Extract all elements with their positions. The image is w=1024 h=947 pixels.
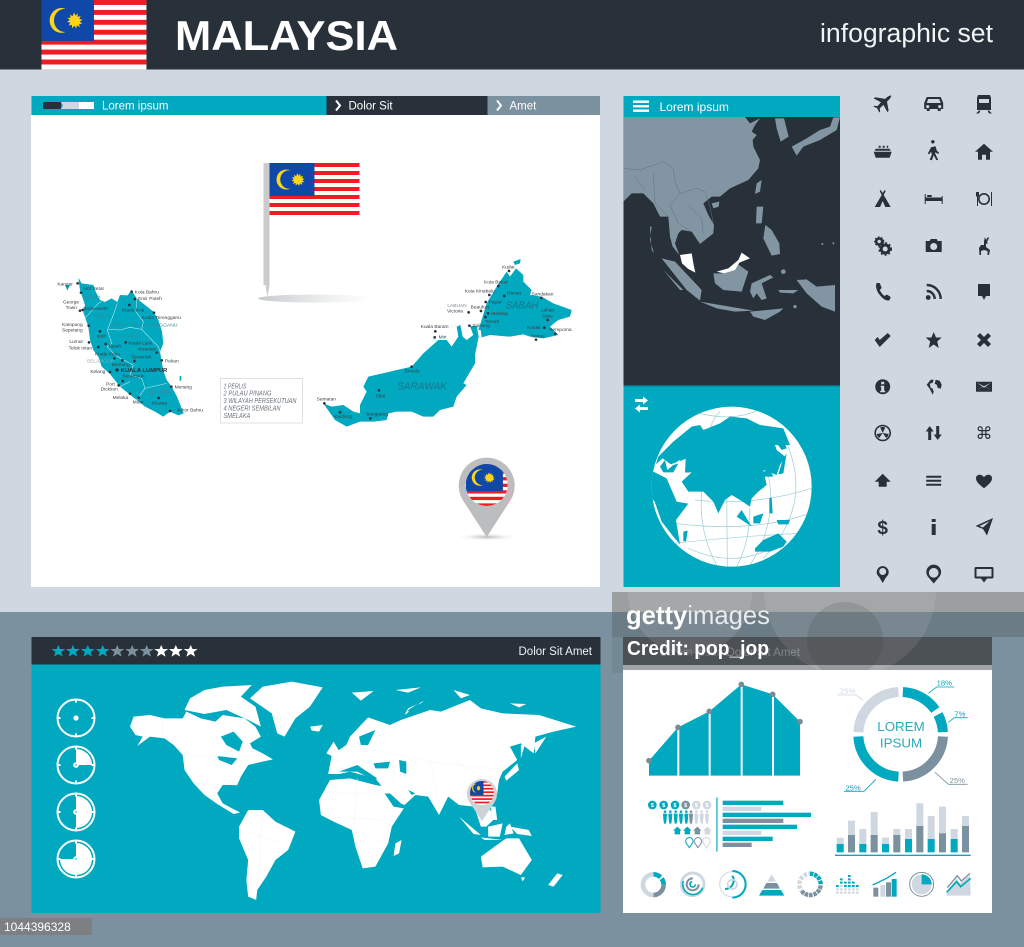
world map land [130,682,576,900]
map: peninsular Malaysia: Mersing [175,385,192,391]
map: East Malaysia: Bintulu [405,369,420,375]
icon: phone [876,283,891,300]
pictogram rows: $ [651,803,655,809]
regional map [623,117,840,386]
icon: gears [875,237,891,255]
pictogram rows: $ [684,803,688,809]
mini icon: donut [643,874,664,895]
map: peninsular Malaysia: Sepetang [62,327,83,333]
column chart [835,803,971,856]
map: peninsular Malaysia: Muar [133,399,144,405]
map: East Malaysia: Sematan [317,397,336,403]
map: peninsular Malaysia: Emir Puteh [138,296,162,302]
icon: bed [925,194,943,204]
map: East Malaysia [317,259,572,427]
tab bar: Lorem ipsum [102,100,168,112]
regional header [624,96,840,117]
icon: plane [873,96,891,112]
charts header: Lorem ipsum [660,647,726,659]
map: peninsular Malaysia: Town [66,305,77,311]
map: East Malaysia: Kota Kinabalu [465,288,495,294]
panel: charts [623,665,992,913]
legend box: 1 PERLIS [224,384,247,390]
map: peninsular Malaysia: Kuala Lipis [128,341,153,347]
icon: speech bubble [978,284,990,300]
tab bar: Dolor Sit [348,100,393,112]
clock 2 [58,746,94,784]
map: peninsular Malaysia: PAHANG [117,334,137,340]
donut chart: LOREM [877,719,925,734]
icon: menu [926,476,941,486]
icon: big pin [926,565,941,584]
map: peninsular Malaysia: Temerloh [131,354,152,360]
icon: tent [875,190,891,207]
star rating [51,645,198,657]
map: peninsular Malaysia: Bentong [112,362,130,368]
icon: rss [926,285,941,300]
map: peninsular Malaysia: PERAK [93,313,111,319]
map: peninsular Malaysia: Kuala Kubu [95,352,120,358]
icon: radiation [875,426,890,440]
title: MALAYSIA [175,12,398,59]
map: East Malaysia: Lahad [541,307,554,313]
icon: mail [976,382,992,392]
world background [32,664,600,913]
icon: up arrow [875,474,891,487]
map: peninsular Malaysia: KEDAH [83,295,101,301]
clock 1 [58,700,94,736]
page background top [0,0,1024,612]
panel: world map [32,637,600,913]
donut chart: IPSUM [880,736,922,751]
icon: walking hiker [928,140,939,160]
panel: regional map [623,96,840,587]
icon: dollar: $ [877,518,888,539]
flag pin [258,163,374,302]
icon: command: ⌘ [976,424,992,444]
map: peninsular Malaysia: Butterworth [83,306,108,312]
map: peninsular Malaysia [57,278,203,417]
map: peninsular Malaysia: Kampung [62,322,83,328]
icon: up down arrows [926,426,942,440]
mini icon: dotted ring [799,874,821,895]
image id [0,918,92,935]
pictogram rows: $ [662,803,666,809]
clock icons [58,700,94,878]
watermark: credit: Credit: pop_jop [627,638,769,660]
donut chart: 7% [954,709,966,718]
mini icon: equalizer [836,875,859,894]
icon: deer [979,237,990,255]
donut chart: 25% [840,686,856,695]
map: peninsular Malaysia: KUALA LUMPUR [121,368,168,374]
map: East Malaysia: Kunak [527,325,541,331]
map: peninsular Malaysia: Kuala Krai [122,307,144,313]
map: peninsular Malaysia: TERENGGANU [142,323,178,329]
pictogram rows: $ [705,803,709,809]
world location pin [467,779,497,821]
mini icon: target [681,873,704,896]
map: East Malaysia: Tenom [485,319,499,325]
map: East Malaysia: Semporna [549,327,572,333]
map: East Malaysia: Ranau [507,291,522,297]
donut chart [837,678,968,792]
mini icon: pie [910,872,934,896]
map: peninsular Malaysia: Teluk Intan [69,346,92,352]
pictogram rows: $ [673,803,677,809]
icon: ship [874,146,892,158]
watermark: gettyimages: gettyimages [626,600,770,630]
icon: car [924,97,943,111]
charts header [623,637,992,665]
icon grid [873,95,994,584]
map: peninsular Malaysia: KELANTAN [112,322,138,328]
area chart [646,681,803,776]
watermark [612,592,1024,673]
panel: Malaysia map [31,96,600,587]
globe panel [624,385,840,587]
icon: camera [926,239,942,252]
map: peninsular Malaysia: JOHOR [148,389,171,396]
clock 4 [58,840,94,878]
world header: Dolor Sit Amet [518,646,593,658]
icon: cross [977,333,991,347]
icon: small pin [877,566,889,583]
mini icon: pyramid [759,874,784,896]
icon: i [932,519,936,535]
world header [32,637,600,664]
image id: 1044396328 [4,920,71,934]
tab bar [32,96,600,115]
map: East Malaysia: Sipitang [472,323,490,329]
map: peninsular Malaysia: Kluang [152,400,167,406]
map: peninsular Malaysia: Pekan [165,359,179,365]
map: peninsular Malaysia: Melaka [113,395,129,401]
icon: plate and cutlery [976,192,992,206]
map: East Malaysia: Tawau [531,333,545,339]
legend box: 2 PULAU PINANG [223,390,272,398]
legend box: 3 WILAYAH PERSEKUTUAN [224,398,297,405]
map: East Malaysia: Papar [489,299,502,305]
icon: world [927,380,942,395]
map: peninsular Malaysia: Kelang [90,369,106,375]
map: peninsular Malaysia: Alor Setar [83,286,105,292]
header band [0,0,1024,70]
icon: send [976,518,993,536]
donut chart: 25% [950,776,965,785]
clock 3 [58,794,94,830]
map: East Malaysia: SARAWAK [397,382,448,393]
map: East Malaysia: Datu [542,313,553,319]
legend box [220,378,302,423]
map: East Malaysia: Sibu [376,393,386,399]
donut chart: 18% [937,678,952,687]
map: peninsular Malaysia: Ipoh [97,334,106,340]
location pin [458,458,515,540]
map: peninsular Malaysia: Kangar [57,281,73,287]
map: peninsular Malaysia: Lumut [69,339,83,345]
map: East Malaysia: Sanggang [366,412,388,418]
regional header: Lorem ipsum [660,100,729,114]
globe [640,407,812,567]
map: East Malaysia: Sandakan [532,292,554,298]
map: East Malaysia: LABUAN [447,303,467,309]
map: East Malaysia: Kuala Baram [421,324,449,330]
map: peninsular Malaysia: Dickson [101,387,118,393]
icon: heart [976,475,992,488]
map: peninsular Malaysia: George [63,300,79,306]
map: peninsular Malaysia: Johor Bahru [177,407,203,413]
map: East Malaysia: Miri [439,335,446,341]
icon: house [975,144,993,160]
donut chart: 25% [845,783,861,792]
mini icon: concentric arcs [720,871,746,898]
pictogram rows: $ [695,803,699,809]
map: peninsular Malaysia: Kuala Terengganu [142,315,181,321]
mini icon: area lines [947,873,971,896]
icon: check [875,333,891,347]
icon: star [926,332,942,348]
legend box: SMELAKA [224,413,251,420]
legend box: 4 NEGERI SEMBILAN [224,406,281,412]
pictogram rows [648,801,712,848]
map: East Malaysia: Kudat [502,264,515,270]
map: East Malaysia: Victoria [447,309,463,315]
map: peninsular Malaysia: Tapah [108,344,121,350]
subtitle: infographic set [820,20,993,48]
swap arrows icon [635,396,648,412]
map: peninsular Malaysia: Kota Bahru [135,289,159,295]
horizontal bar chart [716,797,811,852]
map: peninsular Malaysia: Kuantan [138,347,157,353]
map: peninsular Malaysia: Seremban [122,374,145,380]
header flag [42,0,146,69]
charts header: Dolor Sit Amet [726,647,801,659]
map: East Malaysia: Kota Belud [484,279,508,285]
map: East Malaysia: Kuching [334,414,352,420]
map: peninsular Malaysia: SELANGOR [87,358,115,364]
map: East Malaysia: Beaufort [471,304,490,310]
mini icon: growth [873,872,897,897]
icon: outline bubble [974,567,994,582]
map: East Malaysia: SABAH [506,301,538,312]
map: East Malaysia: Melalap [491,311,509,317]
tab bar: Amet [510,100,537,112]
icon: info [875,379,890,394]
page background bottom [0,612,1024,947]
map: peninsular Malaysia: Port [106,381,116,387]
icon: train [976,95,992,114]
